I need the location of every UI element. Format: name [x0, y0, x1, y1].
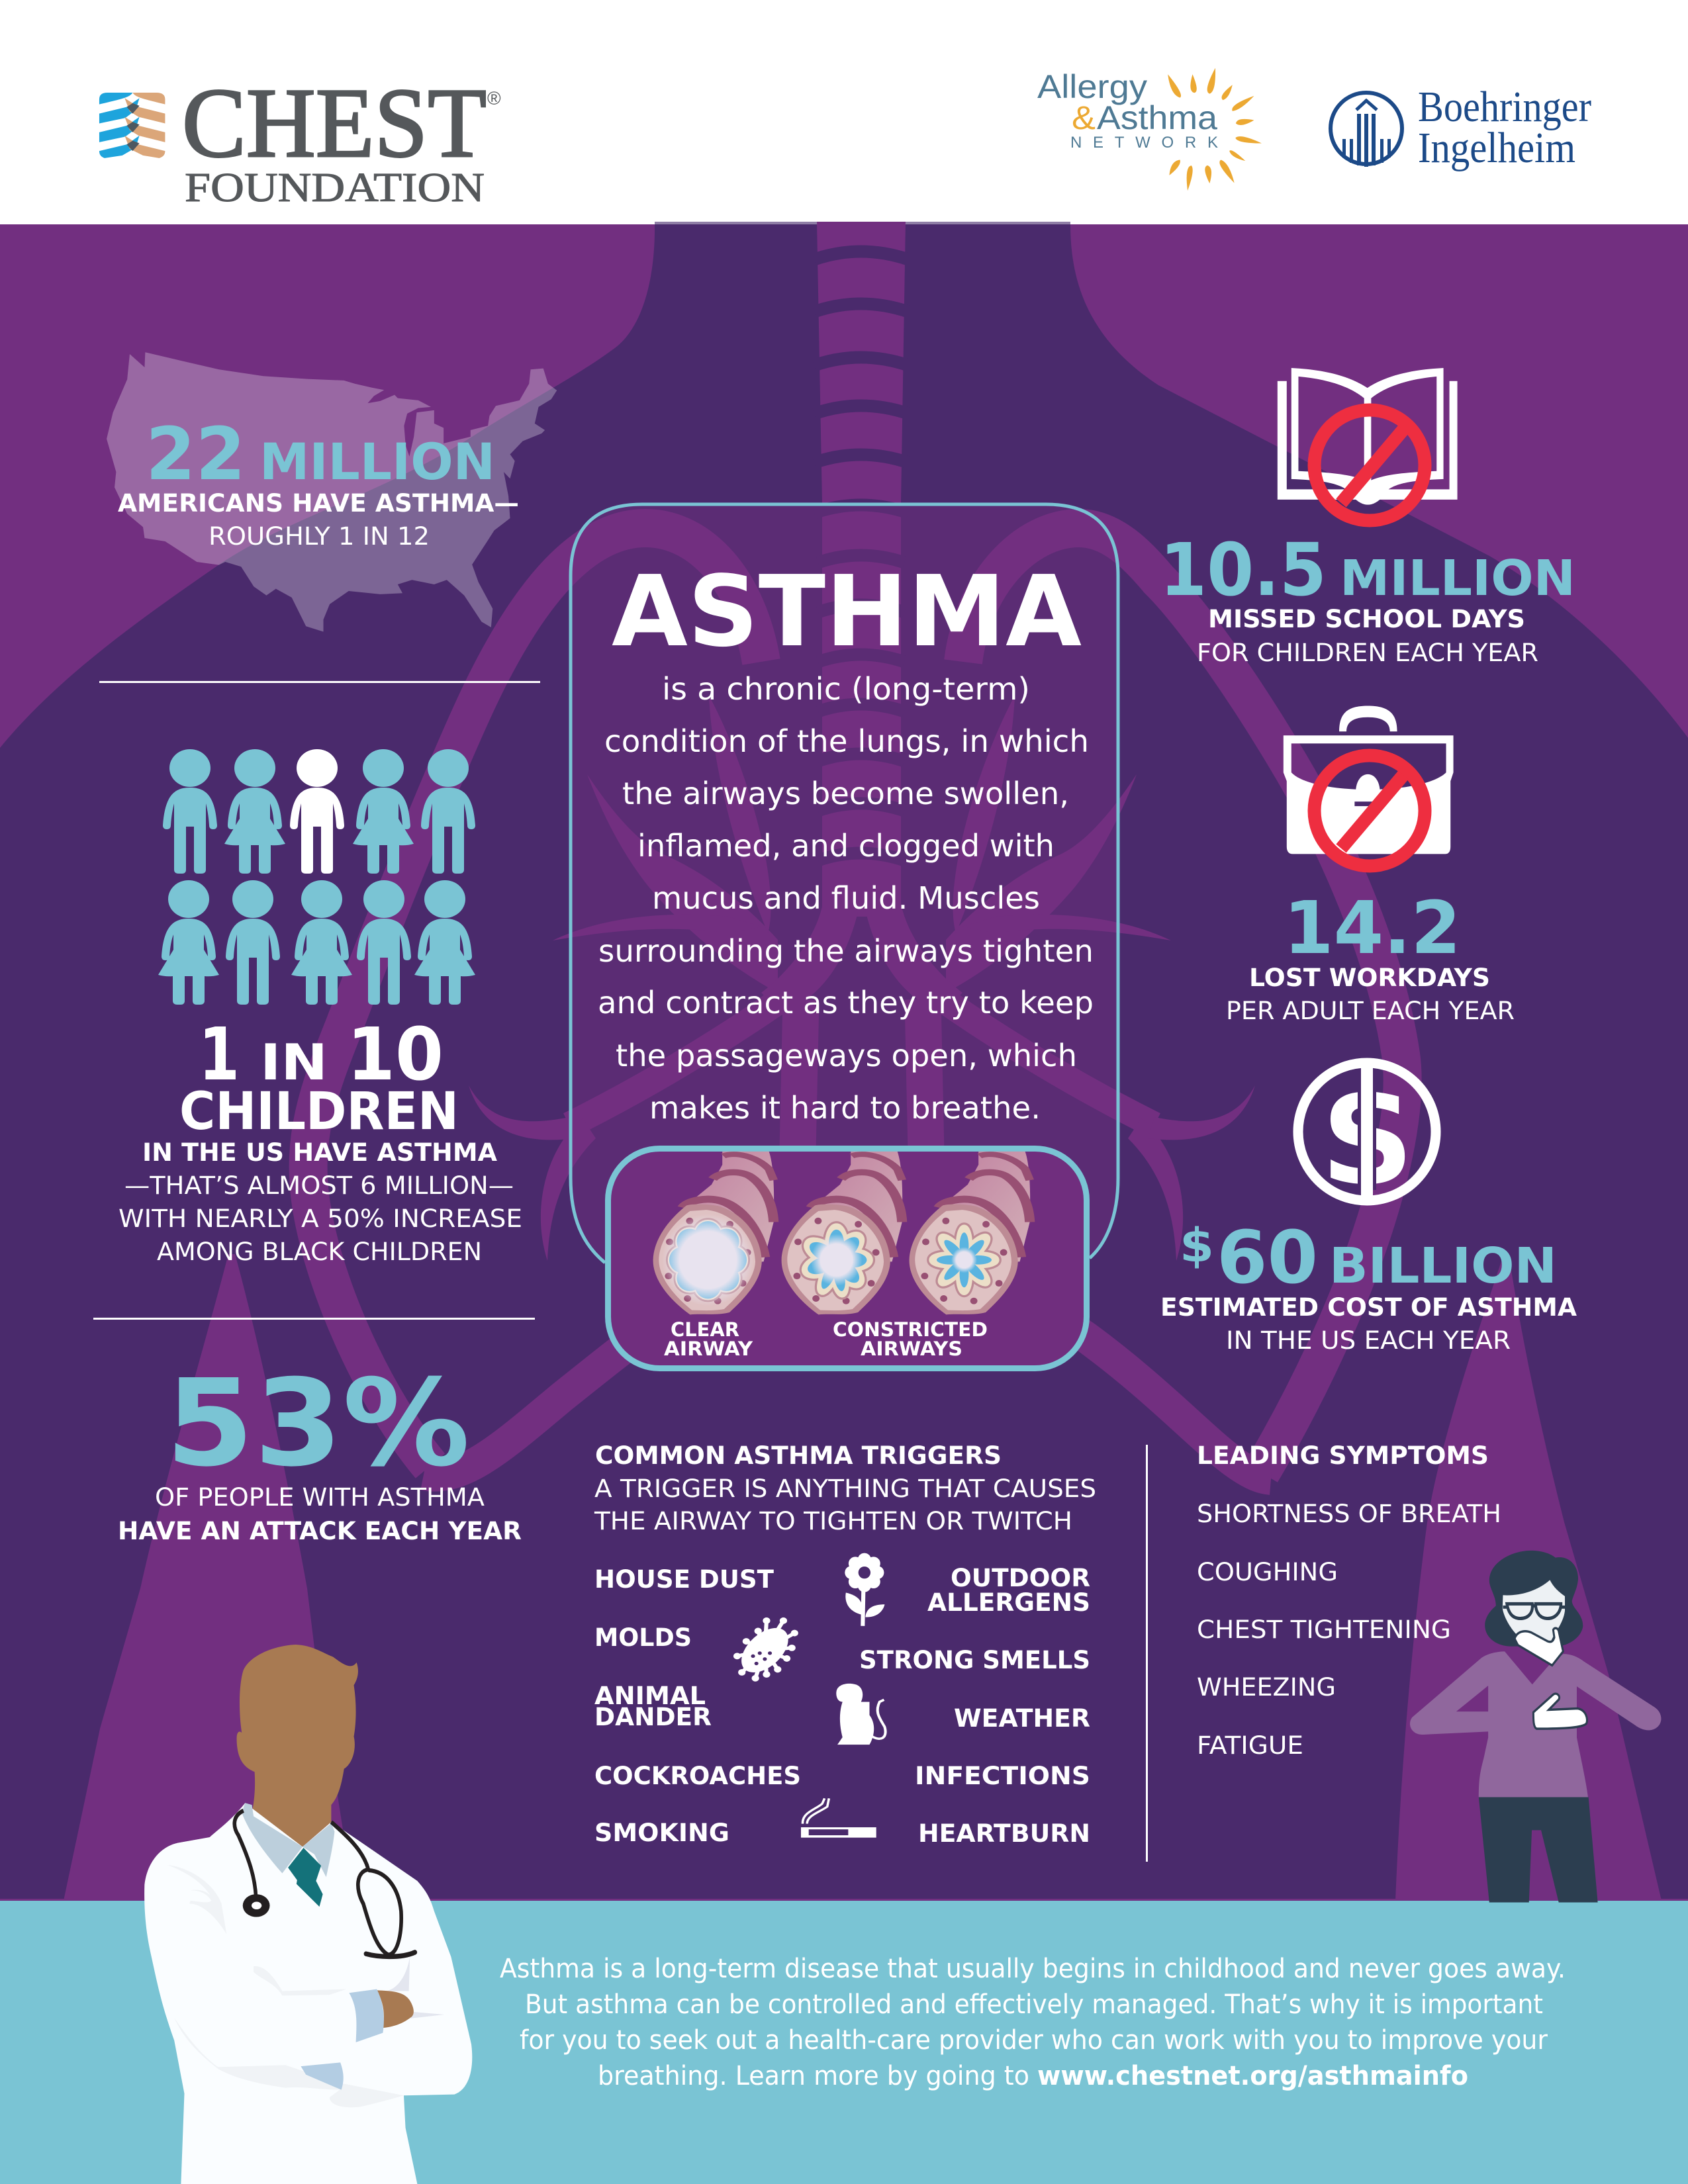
logo: CHEST Foundation	[99, 68, 501, 210]
list: left triggers: DANDER	[594, 1703, 712, 1731]
panel: 22 million	[107, 352, 557, 632]
panel: 1 in 10 children	[118, 749, 522, 1266]
list: left triggers: SMOKING	[594, 1819, 729, 1847]
text: closing message: Asthma is a long-term disease that usually begins in childhood and never goes away.	[500, 1954, 1566, 1984]
icon: sun rays	[1168, 68, 1262, 191]
panel: triggers	[594, 1441, 1096, 1848]
heading: triggers: COMMON ASTHMA TRIGGERS	[595, 1441, 1002, 1470]
text: closing message: for you to seek out a health-care provider who can work with you to improve your	[520, 2025, 1548, 2056]
icon: cigarette	[801, 1798, 876, 1838]
text: per adult: PER ADULT EACH YEAR	[1226, 997, 1515, 1025]
list: left triggers: MOLDS	[594, 1623, 692, 1652]
clear airway	[653, 1152, 774, 1314]
text: estimated cost: ESTIMATED COST OF ASTHMA	[1160, 1293, 1577, 1322]
heading: symptoms: LEADING SYMPTOMS	[1197, 1441, 1489, 1470]
pictogram: ten children	[158, 749, 475, 1005]
definition text: and contract as they try to keep	[598, 985, 1094, 1021]
definition text: the airways become swollen,	[622, 776, 1069, 811]
text: trigger definition: THE AIRWAY TO TIGHTEN OR TWITCH	[594, 1507, 1072, 1535]
definition text: condition of the lungs, in which	[604, 723, 1089, 759]
icon: briefcase with prohibition sign	[1284, 706, 1454, 866]
panel: cost of asthma	[1160, 1052, 1577, 1355]
stat: dollar sign: $	[1180, 1218, 1214, 1273]
definition text: inflamed, and clogged with	[637, 828, 1055, 864]
panel: asthma definition	[571, 504, 1118, 1263]
registered mark: ®	[487, 88, 501, 109]
label: constricted airways: CONSTRICTED	[833, 1318, 988, 1341]
list: right triggers	[859, 1564, 1090, 1848]
text: Ingelheim: Ingelheim	[1418, 124, 1575, 172]
text: roughly 1 in 12: ROUGHLY 1 IN 12	[209, 522, 430, 551]
icon: dog and cat	[836, 1684, 886, 1745]
label: constricted airways: AIRWAYS	[861, 1338, 962, 1360]
list: right triggers: OUTDOOR	[951, 1564, 1090, 1592]
logo: Boehringer Ingelheim	[1331, 83, 1591, 172]
list: symptoms: COUGHING	[1197, 1558, 1338, 1586]
icon: flower	[845, 1553, 884, 1626]
definition text	[598, 671, 1094, 1126]
stat: 1: 1	[199, 1012, 240, 1097]
heading: children: CHILDREN	[179, 1082, 459, 1142]
text: for children: FOR CHILDREN EACH YEAR	[1197, 639, 1538, 667]
wordmark: Foundation: FOUNDATION	[185, 165, 485, 210]
text: Network: NETWORK	[1070, 134, 1218, 152]
text: of people with asthma: OF PEOPLE WITH ASTHMA	[155, 1483, 485, 1512]
wordmark: CHEST: CHEST	[182, 68, 487, 178]
stat: in: IN	[260, 1033, 328, 1091]
icon: mold	[732, 1617, 798, 1682]
list: symptoms: WHEEZING	[1197, 1673, 1336, 1702]
stat: 14.2: 14.2	[1284, 886, 1461, 970]
text: closing message: But asthma can be controlled and effectively managed. That’s why it is important	[525, 1989, 1543, 2020]
title: ASTHMA	[612, 555, 1082, 668]
definition text: surrounding the airways tighten	[598, 933, 1094, 969]
panel: leading symptoms	[1197, 1441, 1661, 1902]
text: in the US each year: IN THE US EACH YEAR	[1226, 1326, 1511, 1355]
list: symptoms: FATIGUE	[1197, 1731, 1303, 1760]
stat: million: MILLION	[259, 432, 495, 491]
definition text: mucus and fluid. Muscles	[652, 880, 1040, 916]
text: missed school days: MISSED SCHOOL DAYS	[1208, 605, 1525, 633]
text: closing message: www.chestnet.org/asthmainfo	[1037, 2061, 1468, 2091]
panel: airway illustrations	[608, 1149, 1087, 1369]
panel outline	[571, 504, 1118, 1263]
icon: Boehringer mark	[1331, 93, 1402, 167]
text: ampersand: &	[1072, 99, 1096, 136]
text: Boehringer: Boehringer	[1418, 83, 1591, 131]
list: left triggers: ANIMAL	[594, 1682, 706, 1710]
icon: book with prohibition sign	[1278, 368, 1458, 520]
severely constricted airway	[910, 1152, 1030, 1314]
text: among black children: AMONG BLACK CHILDREN	[157, 1238, 482, 1266]
text: trigger definition	[594, 1475, 1096, 1535]
footer band	[0, 1901, 1688, 2184]
text: closing message: breathing. Learn more by going to	[598, 2061, 1029, 2091]
stat: 60: 60	[1217, 1215, 1318, 1300]
stat: 22: 22	[146, 412, 246, 496]
list: left triggers	[594, 1565, 801, 1847]
list: symptoms	[1197, 1500, 1501, 1760]
list: right triggers: HEARTBURN	[918, 1819, 1090, 1848]
panel: lost workdays	[1226, 706, 1515, 1025]
text: have an attack: HAVE AN ATTACK EACH YEAR	[118, 1517, 522, 1545]
icon: chest mark	[99, 93, 165, 158]
stat: million: MILLION	[1340, 550, 1575, 607]
list: right triggers: INFECTIONS	[915, 1762, 1090, 1790]
list: right triggers: WEATHER	[954, 1704, 1090, 1733]
list: right triggers: ALLERGENS	[927, 1588, 1090, 1617]
map of the United States	[107, 352, 557, 632]
text: trigger definition: A TRIGGER IS ANYTHING THAT CAUSES	[594, 1475, 1096, 1503]
list: left triggers: COCKROACHES	[594, 1762, 801, 1790]
list: right triggers: STRONG SMELLS	[859, 1646, 1090, 1674]
text: 50 percent increase: WITH NEARLY A 50% INCREASE	[118, 1205, 522, 1233]
purple body panel	[0, 224, 1688, 1901]
label: constricted airways	[833, 1318, 988, 1360]
text: closing message	[500, 1954, 1566, 2091]
panel: 53 percent	[118, 1353, 522, 1545]
list: symptoms: SHORTNESS OF BREATH	[1197, 1500, 1501, 1528]
icon: dollar coin: $	[1320, 1052, 1414, 1218]
icon: airways	[653, 1152, 1030, 1314]
body and lungs silhouette	[0, 222, 1688, 1901]
text: lost workdays: LOST WORKDAYS	[1249, 964, 1490, 992]
definition text: is a chronic (long-term)	[662, 671, 1030, 707]
definition text: makes it hard to breathe.	[649, 1090, 1041, 1126]
text: Asthma: Asthma	[1097, 99, 1217, 136]
text: almost 6 million: —THAT’S ALMOST 6 MILLION—	[124, 1171, 514, 1200]
text: Allergy: Allergy	[1037, 68, 1147, 105]
text: Americans have asthma: AMERICANS HAVE ASTHMA—	[118, 489, 519, 518]
list: symptoms: CHEST TIGHTENING	[1197, 1615, 1451, 1644]
illustration: woman with glasses	[1410, 1551, 1661, 1902]
constricted airway	[782, 1152, 902, 1314]
stat: 10: 10	[347, 1012, 444, 1097]
definition text: the passageways open, which	[616, 1038, 1077, 1073]
label: clear airway	[664, 1318, 753, 1360]
illustration: doctor	[144, 1645, 472, 2184]
text: in the US: IN THE US HAVE ASTHMA	[142, 1138, 497, 1167]
panel: missed school days	[1160, 368, 1575, 667]
airway panel box	[608, 1149, 1087, 1369]
icons: triggers	[732, 1553, 886, 1838]
stat: billion: BILLION	[1329, 1238, 1557, 1295]
logo: Allergy & Asthma Network	[1037, 68, 1262, 191]
stat: 53%: 53%	[165, 1353, 470, 1493]
label: clear airway: AIRWAY	[664, 1338, 753, 1360]
label: clear airway: CLEAR	[671, 1318, 739, 1341]
stat: 10.5: 10.5	[1160, 527, 1327, 612]
list: left triggers: HOUSE DUST	[594, 1565, 774, 1594]
